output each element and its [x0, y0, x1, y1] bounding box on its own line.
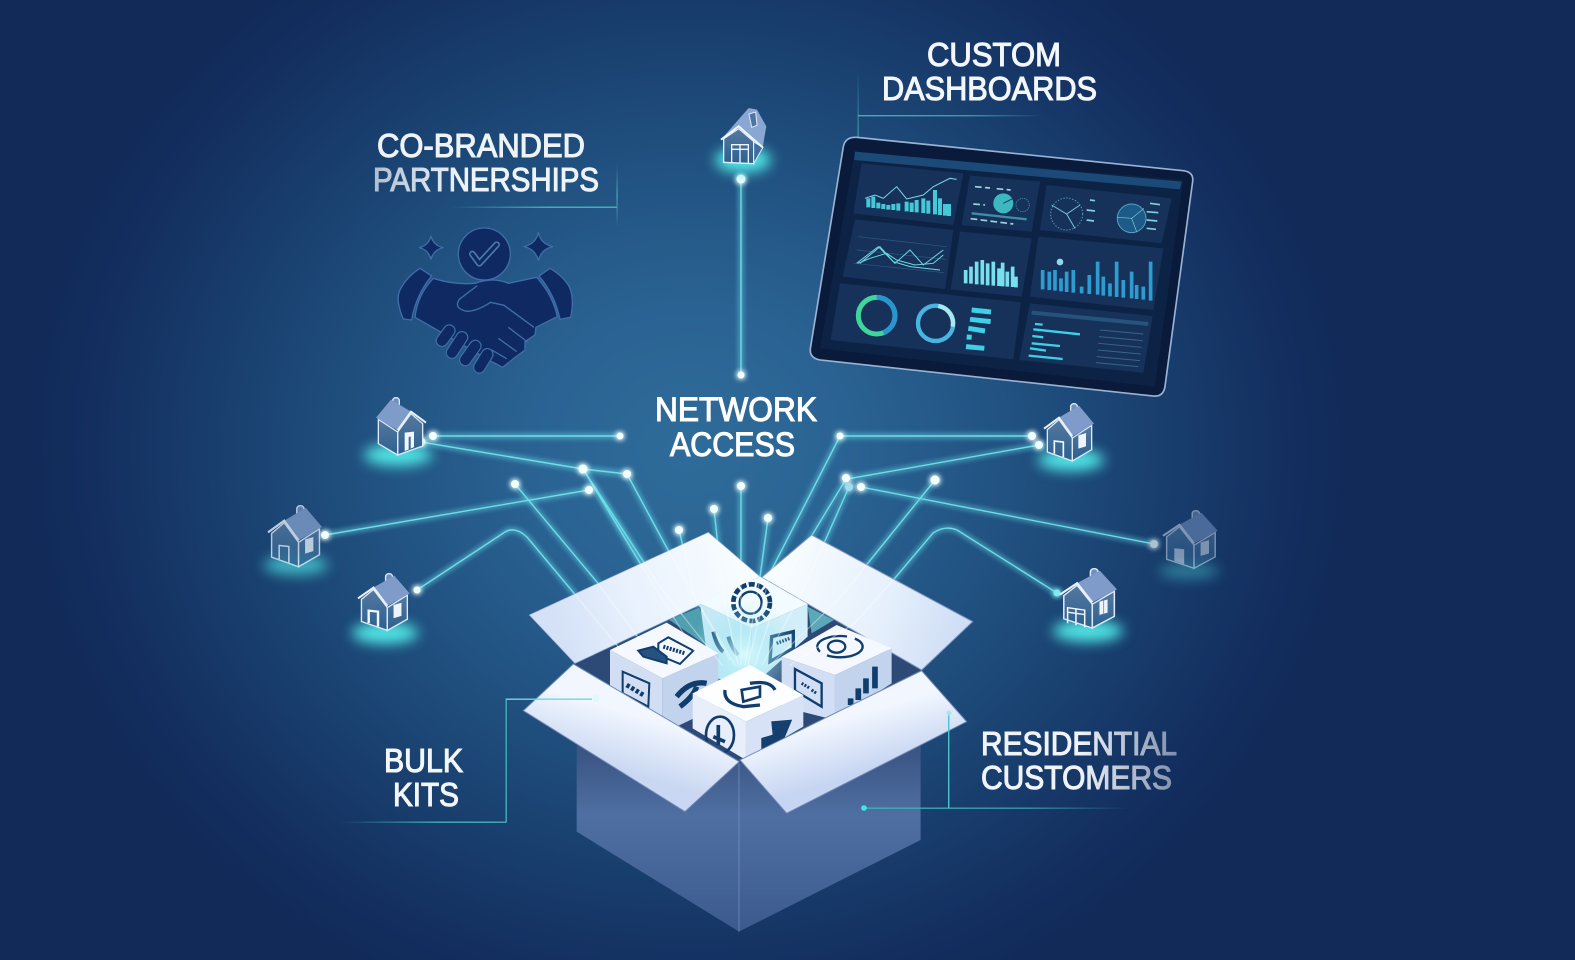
- heading: co-branded partnerships: CO-BRANDED: [377, 127, 585, 164]
- small bars: summary: [966, 310, 991, 348]
- heading: bulk kits: BULK: [384, 742, 463, 779]
- dashboard panels: [831, 163, 1172, 373]
- heading: custom dashboards: CUSTOM: [927, 36, 1061, 73]
- cube: left: [610, 623, 718, 733]
- connector lines glowing: [325, 180, 1154, 665]
- heading: co-branded partnerships: [373, 127, 599, 198]
- panel: co-branded partnerships label: [373, 127, 618, 227]
- heading: residential customers: CUSTOMERS: [981, 759, 1172, 796]
- heading: bulk kits: KITS: [393, 776, 459, 813]
- heading: residential customers: RESIDENTIAL: [981, 725, 1177, 762]
- heading: bulk kits: [384, 742, 463, 813]
- heading: network access: NETWORK: [655, 391, 817, 429]
- light beams over the flaps: [574, 535, 894, 666]
- heading: custom dashboards: [882, 36, 1097, 107]
- icon: house right dim: [1163, 511, 1218, 568]
- small bars: table: [1029, 313, 1148, 367]
- light burst: [688, 600, 802, 710]
- heading: network access: [655, 391, 817, 464]
- network dots: [321, 174, 1158, 596]
- house glows: [264, 147, 1219, 644]
- icon: handshake with check mark: [398, 228, 572, 367]
- box interior: [575, 578, 922, 762]
- tablet with analytics dashboard: [810, 137, 1193, 396]
- bar chart: top left: [865, 178, 957, 216]
- cube: back: [700, 577, 808, 687]
- icon: house left: [268, 506, 322, 567]
- heading: custom dashboards: DASHBOARDS: [882, 70, 1097, 107]
- pie widget: [971, 187, 1029, 224]
- donut charts: [858, 297, 953, 341]
- icon: house lower right: [1060, 569, 1117, 628]
- heading: co-branded partnerships: PARTNERSHIPS: [373, 161, 599, 198]
- bar chart: center: [966, 260, 1016, 287]
- panel: residential customers label: [861, 710, 1177, 811]
- back flaps: [529, 532, 973, 670]
- line chart: [853, 237, 947, 273]
- heading: residential customers: [981, 725, 1177, 796]
- heading: network access: ACCESS: [670, 426, 795, 464]
- front flaps: [523, 664, 967, 813]
- icon: house lower left: [358, 574, 410, 630]
- bar chart: right: [1043, 262, 1151, 301]
- icon: house upper left: [376, 398, 426, 455]
- box body: [577, 720, 921, 932]
- icon: house top: [721, 108, 766, 164]
- icon: house upper right: [1044, 404, 1094, 461]
- cube: right: [782, 625, 892, 720]
- open cardboard box: [523, 532, 973, 932]
- gauges: [1051, 198, 1160, 233]
- cube: front: [693, 665, 803, 760]
- panel: custom dashboards label: [858, 36, 1097, 153]
- panel: bulk kits label: [340, 695, 600, 823]
